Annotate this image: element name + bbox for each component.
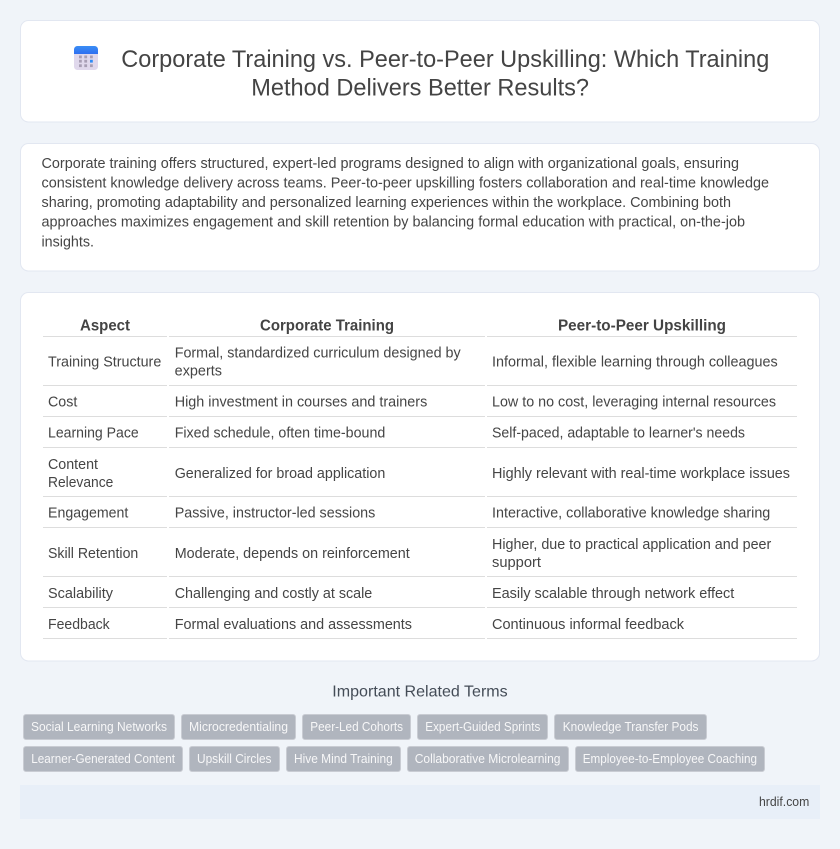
row: training structure: Informal, flexible learning through colleagues (492, 354, 778, 370)
tag: microcredentialing: Microcredentialing (189, 720, 288, 734)
tag: hive mind training: Hive Mind Training (294, 752, 393, 766)
tag: expert-guided sprints: Expert-Guided Sprints (425, 720, 540, 734)
row: skill retention: support (492, 555, 541, 571)
text block: summary: consistent knowledge delivery across teams. Peer-to-peer upskilling fosters collaboration and real-time knowledge (42, 176, 769, 192)
tag: peer-led cohorts (302, 714, 410, 740)
tag: peer-led cohorts: Peer-Led Cohorts (310, 720, 403, 734)
table header row: Peer-to-Peer Upskilling (558, 318, 726, 334)
row: cost: High investment in courses and trainers (175, 395, 427, 411)
row: engagement (48, 506, 770, 522)
row: cost: Cost (48, 395, 77, 411)
heading: important related terms: Important Related Terms (332, 684, 508, 701)
row: training structure: experts (175, 364, 222, 380)
row: scalability: Challenging and costly at scale (175, 586, 372, 602)
row: feedback: Continuous informal feedback (492, 617, 685, 633)
row: feedback: Feedback (48, 617, 110, 633)
row: scalability: Easily scalable through network effect (492, 586, 734, 602)
text block: summary: insights. (42, 234, 94, 250)
row: cost (48, 395, 776, 411)
table header row: Corporate Training (260, 318, 394, 334)
title: Method Delivers Better Results? (251, 74, 589, 102)
table header row: Aspect (80, 318, 131, 334)
row: feedback: Formal evaluations and assessments (175, 617, 412, 633)
tag: collaborative microlearning (408, 746, 568, 772)
tag: learner-generated content: Learner-Generated Content (31, 752, 175, 766)
text block: summary: approaches maximizes engagement and skill retention by balancing formal education with practical, on-the-job (42, 215, 745, 231)
row: training structure (48, 346, 778, 380)
text block: summary (42, 156, 769, 250)
row: content relevance: Generalized for broad application (175, 466, 385, 482)
panel: summary paragraph (20, 144, 820, 271)
panel: comparison table (20, 292, 820, 661)
row: skill retention (48, 537, 771, 571)
tag: upskill circles: Upskill Circles (197, 752, 272, 766)
text block: summary: Corporate training offers structured, expert-led programs designed to align with organizational goals, ensuring (42, 156, 739, 172)
title: Corporate Training vs. Peer-to-Peer Upskilling: Which Training (121, 46, 769, 73)
text block: summary: sharing, promoting adaptability and personalized learning experiences within the workplace. Combining both (42, 195, 731, 211)
row: skill retention: Higher, due to practical application and peer (492, 537, 771, 553)
row: engagement: Interactive, collaborative knowledge sharing (492, 506, 770, 522)
row: feedback (48, 617, 685, 633)
title (121, 46, 769, 102)
icon: calendar (74, 46, 98, 70)
tag: employee-to-employee coaching: Employee-to-Employee Coaching (583, 752, 757, 766)
row: learning pace (48, 426, 745, 442)
row: content relevance (48, 457, 790, 491)
panel: header (20, 20, 820, 122)
tag: microcredentialing (182, 714, 296, 740)
footer bar (20, 785, 820, 819)
row: skill retention: Moderate, depends on reinforcement (175, 546, 410, 562)
row: engagement: Passive, instructor-led sessions (175, 506, 375, 522)
row: scalability: Scalability (48, 586, 114, 602)
table header row (80, 318, 726, 334)
row: learning pace: Learning Pace (48, 426, 139, 442)
tag: hive mind training (286, 746, 400, 772)
tag: knowledge transfer pods: Knowledge Transfer Pods (563, 720, 698, 734)
row: training structure: Formal, standardized curriculum designed by (175, 346, 461, 362)
tag: knowledge transfer pods (554, 714, 706, 740)
tag: upskill circles (190, 746, 280, 772)
row: engagement: Engagement (48, 506, 128, 522)
row: content relevance: Content (48, 457, 98, 473)
row: scalability (48, 586, 734, 602)
row: learning pace: Fixed schedule, often time-bound (175, 426, 385, 442)
related term tags (24, 714, 764, 772)
tag: learner-generated content (24, 746, 182, 772)
row: cost: Low to no cost, leveraging internal resources (492, 395, 776, 411)
tag: social learning networks: Social Learning Networks (31, 720, 167, 734)
row: content relevance: Relevance (48, 475, 113, 491)
row: training structure: Training Structure (48, 354, 161, 370)
tag: employee-to-employee coaching (576, 746, 764, 772)
tag: social learning networks (24, 714, 174, 740)
tag: expert-guided sprints (418, 714, 548, 740)
tag: collaborative microlearning: Collaborative Microlearning (415, 752, 561, 766)
row: content relevance: Highly relevant with real-time workplace issues (492, 466, 790, 482)
row: learning pace: Self-paced, adaptable to learner's needs (492, 426, 745, 442)
row: skill retention: Skill Retention (48, 546, 138, 562)
footer source label: hrdif.com (759, 795, 809, 809)
